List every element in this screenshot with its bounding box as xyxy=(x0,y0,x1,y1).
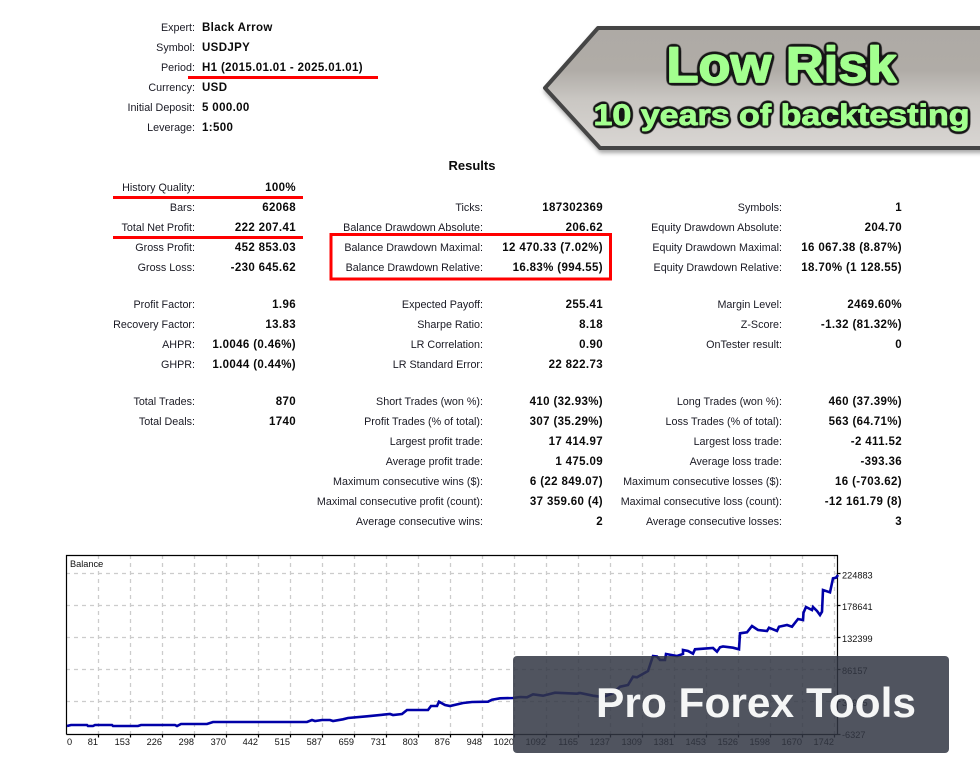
results column 3: Loss Trades (% of total): xyxy=(665,416,782,428)
x axis labels: 803 xyxy=(403,737,418,747)
results column 3: Equity Drawdown Relative: xyxy=(654,262,782,274)
x axis labels: 1309 xyxy=(622,737,642,747)
results column 1: 62068 xyxy=(262,202,296,214)
results column 2: Maximum consecutive wins ($): xyxy=(333,476,483,488)
results column 3: 3 xyxy=(895,516,902,528)
results heading: Results xyxy=(449,158,495,173)
y axis labels xyxy=(842,570,873,740)
results column 3: Maximal consecutive loss (count): xyxy=(621,496,782,508)
chart frame xyxy=(66,556,840,738)
x axis labels: 587 xyxy=(307,737,322,747)
x axis labels: 1092 xyxy=(526,737,546,747)
x axis labels: 948 xyxy=(467,737,482,747)
results column 3: -12 161.79 (8) xyxy=(825,496,902,508)
results column 3: -393.36 xyxy=(860,456,902,468)
results column 3: -2 411.52 xyxy=(851,436,902,448)
results column 2: 17 414.97 xyxy=(549,436,603,448)
results column 3 xyxy=(621,202,902,528)
results column 2: Maximal consecutive profit (count): xyxy=(317,496,483,508)
report header: USDJPY xyxy=(202,42,250,54)
x axis labels: 1165 xyxy=(558,737,578,747)
x axis labels: 876 xyxy=(435,737,450,747)
y axis labels: 132399 xyxy=(842,634,873,644)
results column 2: 0.90 xyxy=(579,339,603,351)
x axis labels: 153 xyxy=(115,737,130,747)
results column 1: Total Deals: xyxy=(139,416,195,428)
x axis labels: 298 xyxy=(179,737,194,747)
results column 1: Total Net Profit: xyxy=(122,222,195,234)
history quality underline xyxy=(113,196,303,199)
results column 1: Profit Factor: xyxy=(133,299,195,311)
results column 2 xyxy=(317,202,603,528)
x axis labels: 1526 xyxy=(718,737,738,747)
results column 1: 1.0046 (0.46%) xyxy=(212,339,296,351)
results column 2: Balance Drawdown Maximal: xyxy=(344,242,483,254)
x axis labels: 1237 xyxy=(590,737,610,747)
report header: H1 (2015.01.01 - 2025.01.01) xyxy=(202,62,363,74)
report header: Period: xyxy=(161,62,195,74)
x axis labels: 1020 xyxy=(494,737,514,747)
results column 2: Balance Drawdown Absolute: xyxy=(343,222,483,234)
results column 1: 870 xyxy=(276,396,296,408)
report header: Currency: xyxy=(148,82,195,94)
results column 1: 1.96 xyxy=(272,299,296,311)
results column 3: Average consecutive losses: xyxy=(646,516,782,528)
results column 1: -230 645.62 xyxy=(231,262,296,274)
x axis labels: 81 xyxy=(88,737,98,747)
x axis labels xyxy=(67,737,834,747)
results column 2: LR Standard Error: xyxy=(393,359,483,371)
y axis labels: 39915 xyxy=(842,698,868,708)
report header: USD xyxy=(202,82,227,94)
results column 1: Gross Loss: xyxy=(138,262,195,274)
report header: Symbol: xyxy=(156,42,195,54)
results column 2: Average profit trade: xyxy=(386,456,483,468)
results column 2: Balance Drawdown Relative: xyxy=(346,262,483,274)
drawdown highlight box xyxy=(331,234,610,279)
results column 3: OnTester result: xyxy=(706,339,782,351)
results column 3: Maximum consecutive losses ($): xyxy=(623,476,782,488)
results column 3: Z-Score: xyxy=(741,319,782,331)
results column 1: Total Trades: xyxy=(133,396,195,408)
results column 3: Average loss trade: xyxy=(690,456,782,468)
y axis labels: -6327 xyxy=(842,730,866,740)
results column 2: 1 475.09 xyxy=(555,456,603,468)
report header: Initial Deposit: xyxy=(127,102,195,114)
results column 1: Gross Profit: xyxy=(135,242,195,254)
x axis labels: 0 xyxy=(67,737,72,747)
report header: Leverage: xyxy=(147,122,195,134)
x axis labels: 659 xyxy=(339,737,354,747)
results column 3: 0 xyxy=(895,339,902,351)
y axis labels: 224883 xyxy=(842,570,873,580)
balance chart xyxy=(66,555,873,747)
x axis labels: 1598 xyxy=(750,737,770,747)
x axis labels: 1742 xyxy=(814,737,834,747)
results column 2: 12 470.33 (7.02%) xyxy=(502,242,603,254)
results column 2: Sharpe Ratio: xyxy=(417,319,483,331)
results column 2: Largest profit trade: xyxy=(390,436,483,448)
chart legend: Balance xyxy=(70,559,103,569)
results column 2: 22 822.73 xyxy=(549,359,603,371)
results column 2: 16.83% (994.55) xyxy=(513,262,603,274)
results column 3: Long Trades (won %): xyxy=(677,396,782,408)
results column 2: 8.18 xyxy=(579,319,603,331)
report header: 1:500 xyxy=(202,122,233,134)
results column 1 xyxy=(113,182,296,428)
results column 2: Profit Trades (% of total): xyxy=(364,416,483,428)
results column 2: 255.41 xyxy=(566,299,603,311)
y axis labels: 86157 xyxy=(842,666,868,676)
watermark panel xyxy=(513,656,949,753)
results column 1: Recovery Factor: xyxy=(113,319,195,331)
results column 3: 18.70% (1 128.55) xyxy=(801,262,902,274)
results column 3: Largest loss trade: xyxy=(694,436,782,448)
results column 1: 452 853.03 xyxy=(235,242,296,254)
results column 1: AHPR: xyxy=(162,339,195,351)
x axis labels: 1381 xyxy=(654,737,674,747)
x axis labels: 370 xyxy=(211,737,226,747)
results column 2: 2 xyxy=(596,516,603,528)
results column 3: 1 xyxy=(895,202,902,214)
banner subtitle: 10 years of backtesting xyxy=(594,99,970,132)
report header xyxy=(127,22,363,134)
report header: Expert: xyxy=(161,22,195,34)
banner: low risk xyxy=(545,28,980,148)
results column 3: 16 067.38 (8.87%) xyxy=(801,242,902,254)
results column 2: Average consecutive wins: xyxy=(356,516,483,528)
period underline xyxy=(188,76,378,79)
results column 1: 222 207.41 xyxy=(235,222,296,234)
results column 1: 1.0044 (0.44%) xyxy=(212,359,296,371)
results column 2: 206.62 xyxy=(566,222,603,234)
results column 3: -1.32 (81.32%) xyxy=(821,319,902,331)
results column 1: 13.83 xyxy=(265,319,296,331)
results column 2: Expected Payoff: xyxy=(402,299,483,311)
results column 1: 1740 xyxy=(269,416,296,428)
banner title: Low Risk xyxy=(666,37,897,93)
results column 3: Equity Drawdown Maximal: xyxy=(652,242,782,254)
net profit underline xyxy=(113,236,303,239)
results column 2: 410 (32.93%) xyxy=(530,396,603,408)
y axis labels: 178641 xyxy=(842,602,873,612)
results column 2: Short Trades (won %): xyxy=(376,396,483,408)
results column 2: 187302369 xyxy=(542,202,603,214)
x axis labels: 1670 xyxy=(782,737,802,747)
results column 1: 100% xyxy=(265,182,296,194)
x axis labels: 515 xyxy=(275,737,290,747)
results column 2: LR Correlation: xyxy=(411,339,483,351)
x axis labels: 1453 xyxy=(686,737,706,747)
results column 3: Margin Level: xyxy=(717,299,782,311)
results column 3: 16 (-703.62) xyxy=(835,476,902,488)
results column 3: 460 (37.39%) xyxy=(829,396,902,408)
results column 3: Equity Drawdown Absolute: xyxy=(651,222,782,234)
x axis labels: 442 xyxy=(243,737,258,747)
results column 2: 37 359.60 (4) xyxy=(530,496,603,508)
report header: 5 000.00 xyxy=(202,102,250,114)
results column 3: 204.70 xyxy=(865,222,902,234)
results column 2: 307 (35.29%) xyxy=(530,416,603,428)
x axis labels: 731 xyxy=(371,737,386,747)
results column 2: Ticks: xyxy=(455,202,483,214)
x axis labels: 226 xyxy=(147,737,162,747)
results column 3: Symbols: xyxy=(738,202,782,214)
balance line xyxy=(67,575,838,726)
report header: Black Arrow xyxy=(202,22,273,34)
results column 2: 6 (22 849.07) xyxy=(530,476,603,488)
results column 1: History Quality: xyxy=(122,182,195,194)
watermark text: Pro Forex Tools xyxy=(596,679,916,726)
results column 3: 2469.60% xyxy=(847,299,902,311)
results column 1: Bars: xyxy=(170,202,195,214)
results column 3: 563 (64.71%) xyxy=(829,416,902,428)
results column 1: GHPR: xyxy=(161,359,195,371)
